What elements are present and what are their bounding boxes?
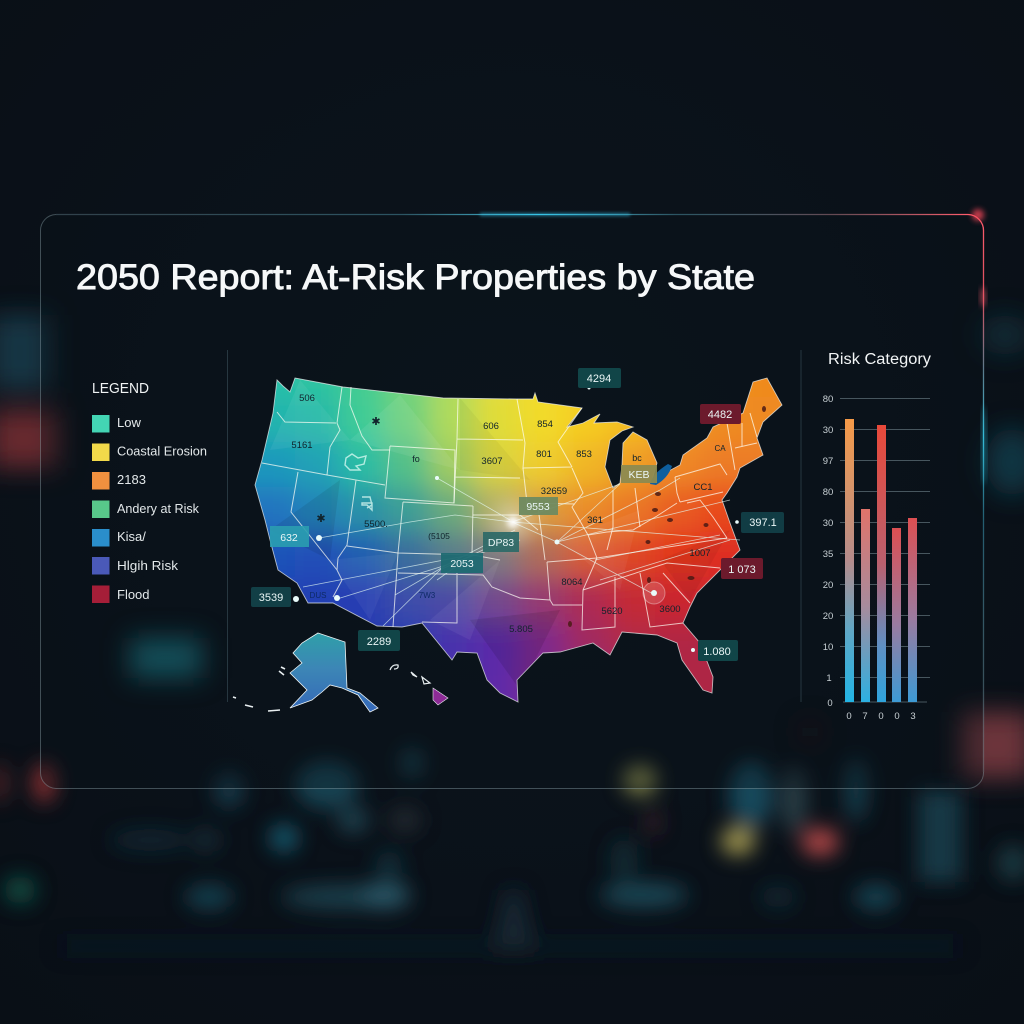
state borders bbox=[262, 387, 757, 630]
chart y axis labels: 1 bbox=[826, 673, 832, 684]
callout: KEB bbox=[621, 465, 657, 483]
map numeric labels: (5105 bbox=[428, 531, 450, 541]
chart y axis labels: 20 bbox=[823, 580, 833, 591]
callout: 632 bbox=[270, 526, 309, 547]
legend item: Low bbox=[92, 415, 141, 432]
small dark marks: fo bbox=[412, 454, 420, 464]
map numeric labels: 5161 bbox=[291, 440, 313, 451]
map small icons bbox=[345, 454, 372, 510]
chart grid lines bbox=[840, 398, 930, 702]
legend item: Kisa: Kisa/ bbox=[117, 529, 146, 544]
callout: 4294: 4294 bbox=[587, 373, 611, 385]
legend item: Andery at Risk: Andery at Risk bbox=[117, 501, 199, 516]
map facets bbox=[270, 380, 730, 690]
small dark marks: ✱ bbox=[371, 416, 381, 428]
map numeric labels bbox=[291, 393, 726, 672]
map numeric labels: 32659 bbox=[541, 486, 567, 497]
chart x axis labels: 3 bbox=[910, 711, 916, 722]
legend item: 2183: 2183 bbox=[117, 472, 146, 487]
legend item: Coastal Erosion: Coastal Erosion bbox=[117, 444, 207, 458]
callout: 9553 bbox=[519, 497, 558, 515]
panel: legend bbox=[92, 381, 207, 603]
callout: 2289: 2289 bbox=[367, 636, 391, 648]
map: contiguous US risk choropleth bbox=[254, 378, 782, 703]
map numeric labels: 606 bbox=[483, 421, 499, 432]
chart y axis labels: 0 bbox=[827, 698, 833, 709]
callout: 4482: 4482 bbox=[708, 409, 732, 421]
callout: 1073: 1 073 bbox=[728, 564, 756, 576]
map numeric labels: CC1 bbox=[693, 482, 713, 493]
chart x axis labels: 7 bbox=[862, 711, 868, 722]
small dark marks: bc bbox=[632, 453, 642, 463]
legend heading: LEGEND bbox=[92, 381, 149, 397]
map numeric labels: 5.805 bbox=[509, 624, 533, 635]
chart x axis labels bbox=[846, 711, 916, 722]
state icons bbox=[568, 406, 766, 627]
map numeric labels: 1007 bbox=[689, 548, 711, 559]
small dark marks: ✱ bbox=[316, 513, 326, 525]
callout: KEB: KEB bbox=[628, 469, 650, 481]
callout: 3539 bbox=[251, 587, 291, 607]
dividers bbox=[228, 350, 801, 702]
callouts bbox=[251, 368, 784, 661]
map numeric labels: 853 bbox=[576, 449, 592, 460]
callout: 1080: 1.080 bbox=[703, 646, 731, 658]
map numeric labels: CA bbox=[714, 444, 726, 453]
legend item: Flood: Flood bbox=[117, 587, 150, 602]
chart x axis labels: 0 bbox=[878, 711, 884, 722]
callout: 9553: 9553 bbox=[526, 501, 550, 513]
map numeric labels: 5500. bbox=[364, 519, 388, 530]
map numeric labels: 854 bbox=[537, 419, 553, 430]
map numeric labels: 5620 bbox=[601, 606, 623, 617]
chart y axis labels bbox=[823, 394, 833, 709]
legend item: Coastal Erosion bbox=[92, 444, 207, 461]
chart heading: Risk Category bbox=[828, 351, 931, 368]
map numeric labels: 8064 bbox=[561, 577, 583, 588]
blurred city background bbox=[0, 315, 1024, 952]
legend item: 2183 bbox=[92, 472, 146, 490]
map: Hawaii bbox=[390, 665, 448, 705]
panel: glass frame bbox=[40, 209, 986, 788]
map numeric labels: 361 bbox=[587, 515, 603, 526]
legend item: Flood bbox=[92, 586, 150, 603]
map numeric labels: 3600 bbox=[659, 604, 681, 615]
callout: 4294 bbox=[578, 368, 621, 388]
callout: 2289 bbox=[358, 630, 400, 651]
small dark marks bbox=[316, 416, 642, 525]
lake accent bbox=[650, 464, 672, 485]
map numeric labels: 998 bbox=[313, 662, 327, 672]
callout: 3539: 3539 bbox=[259, 592, 283, 604]
map outline bbox=[255, 378, 782, 702]
legend item: High Risk: Hlgih Risk bbox=[117, 558, 179, 573]
map: Alaska bbox=[233, 633, 378, 712]
bars bbox=[845, 419, 917, 702]
chart y axis labels: 97 bbox=[823, 456, 833, 467]
callout: 1073 bbox=[721, 558, 763, 579]
callout: DP83: DP83 bbox=[488, 537, 514, 549]
legend item: Kisa bbox=[92, 529, 146, 546]
callout: 2053: 2053 bbox=[450, 558, 474, 570]
chart y axis labels: 80 bbox=[823, 487, 833, 498]
map numeric labels: 801 bbox=[536, 449, 552, 460]
legend item: Andery at Risk bbox=[92, 500, 199, 518]
callout: 397.1: 397.1 bbox=[749, 517, 777, 529]
chart y axis labels: 20 bbox=[823, 611, 833, 622]
callout: DP83 bbox=[483, 532, 519, 552]
map numeric labels: 7W3 bbox=[419, 591, 436, 600]
legend item: High Risk bbox=[92, 557, 179, 574]
chart x axis labels: 0 bbox=[846, 711, 852, 722]
title: 2050 Report: At-Risk Properties by State bbox=[76, 258, 755, 297]
chart y axis labels: 30 bbox=[823, 425, 833, 436]
chart y axis labels: 30 bbox=[823, 518, 833, 529]
callout: 2053 bbox=[441, 553, 483, 573]
map numeric labels: 506 bbox=[299, 393, 315, 404]
callout: 397.1 bbox=[741, 512, 784, 533]
chart y axis labels: 35 bbox=[823, 549, 833, 560]
callout: 632: 632 bbox=[280, 532, 298, 544]
map colour field bbox=[255, 378, 782, 702]
chart y axis labels: 10 bbox=[823, 642, 833, 653]
map numeric labels: DUS bbox=[310, 591, 326, 600]
chart x axis labels: 0 bbox=[894, 711, 900, 722]
legend item: Low: Low bbox=[117, 415, 141, 430]
callout: 1080 bbox=[698, 640, 738, 661]
network lines bbox=[303, 478, 740, 626]
panel: risk category bar chart bbox=[823, 351, 931, 722]
map hub glow bbox=[493, 502, 533, 542]
map numeric labels: 3607 bbox=[481, 456, 503, 467]
map nodes bbox=[293, 386, 739, 652]
chart y axis labels: 80 bbox=[823, 394, 833, 405]
callout: 4482 bbox=[700, 404, 741, 424]
